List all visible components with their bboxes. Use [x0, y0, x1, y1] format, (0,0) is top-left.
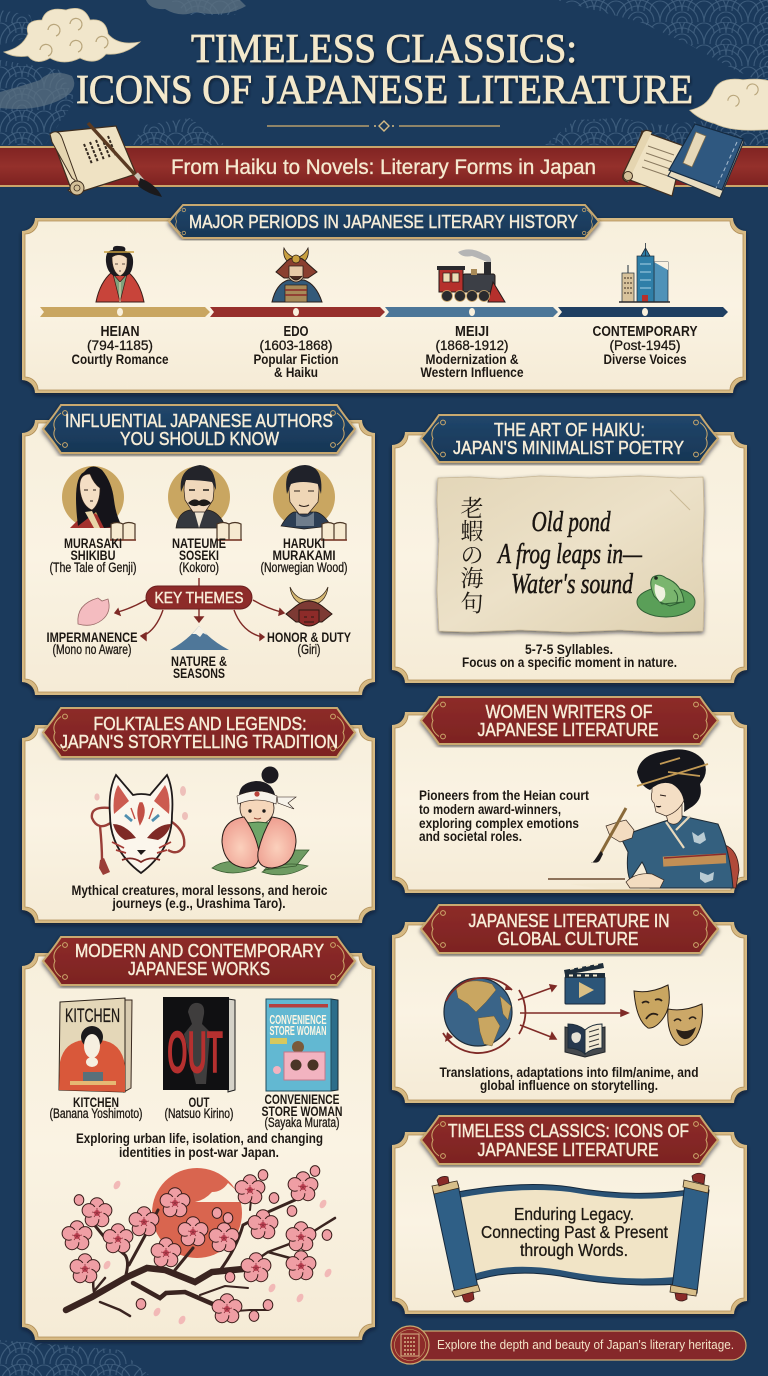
- book labels: (Natsuo Kirino): [164, 1106, 234, 1121]
- book labels: (Sayaka Murata): [264, 1115, 340, 1130]
- global caption: global influence on storytelling.: [480, 1078, 658, 1093]
- icon: scroll and brush: [50, 123, 162, 197]
- label: heian: (794-1185): [87, 338, 153, 353]
- vertical japanese text: 海: [460, 560, 484, 593]
- label: heian: HEIAN: [100, 324, 140, 340]
- label: contemporary: Diverse Voices: [604, 352, 686, 367]
- women writers text: exploring complex emotions: [419, 816, 579, 831]
- theme labels: SEASONS: [173, 666, 225, 681]
- icon: seal: [391, 1326, 429, 1364]
- panel: enduring legacy: [392, 1116, 747, 1314]
- cloud top left: [4, 8, 140, 62]
- book labels: (Banana Yoshimoto): [50, 1106, 142, 1121]
- haiku lines: Water's sound: [511, 569, 634, 600]
- book: convenience store woman: CONVENIENCE: [270, 1013, 326, 1027]
- panel: global culture: [392, 905, 747, 1103]
- heading banner: FOLKTALES AND LEGENDS:: [94, 714, 306, 734]
- heading banner: INFLUENTIAL JAPANESE AUTHORS: [65, 411, 333, 431]
- women writers text: to modern award-winners,: [419, 802, 561, 817]
- grey cloud top: [146, 0, 246, 14]
- icon: open book and blue book: [623, 124, 744, 198]
- title: TIMELESS CLASSICS:: [191, 25, 577, 71]
- label: meiji: Western Influence: [420, 365, 524, 380]
- panel: women writers: [392, 697, 747, 893]
- vertical japanese text: 蝦: [460, 513, 484, 546]
- key themes pill: KEY THEMES: [154, 590, 244, 607]
- heading banner: [43, 708, 355, 757]
- panel: modern and contemporary works: [22, 937, 375, 1340]
- global caption: [440, 1065, 698, 1093]
- heading banner: [43, 937, 355, 985]
- book: convenience store woman: [266, 999, 338, 1091]
- haiku lines: A frog leaps in—: [496, 539, 643, 570]
- subtitle: From Haiku to Novels: Literary Forms in Japan: [171, 155, 596, 179]
- title divider: [267, 121, 500, 131]
- panel: major periods: [22, 205, 746, 393]
- illustration: red sun: [152, 1168, 242, 1258]
- book labels: OUT: [188, 1095, 210, 1110]
- illustration: woman writing with brush: [548, 749, 739, 889]
- legacy text: Connecting Past & Present: [481, 1222, 668, 1242]
- icon: city skyscrapers: [619, 243, 670, 302]
- women writers text: [419, 788, 589, 844]
- title: ICONS OF JAPANESE LITERATURE: [76, 66, 693, 112]
- label: edo: & Haiku: [274, 365, 318, 380]
- heading banner: [421, 415, 718, 462]
- label: contemporary: (Post-1945): [610, 338, 680, 353]
- heading banner: JAPANESE LITERATURE: [478, 720, 658, 740]
- label: edo: Popular Fiction: [254, 352, 338, 367]
- panel: folktales: [22, 708, 375, 923]
- heading banner: MODERN AND CONTEMPORARY: [75, 941, 324, 961]
- label: edo: (1603-1868): [260, 338, 332, 353]
- heading banner: GLOBAL CULTURE: [498, 929, 638, 949]
- portrait: murasaki shikibu: [62, 466, 136, 540]
- icon: film clapperboard: [564, 963, 605, 1004]
- icon: comedy and tragedy masks: [634, 985, 702, 1045]
- cloud right: [690, 79, 768, 130]
- heading banner: TIMELESS CLASSICS: ICONS OF: [448, 1121, 689, 1141]
- book labels: KITCHEN: [73, 1095, 119, 1110]
- modern works caption: Exploring urban life, isolation, and changing: [76, 1131, 323, 1146]
- illustration: scroll: [432, 1173, 709, 1302]
- heading banner: JAPANESE LITERATURE: [478, 1140, 658, 1160]
- panel: art of haiku: [392, 415, 747, 683]
- author names: (The Tale of Genji): [50, 560, 136, 575]
- women writers text: Pioneers from the Heian court: [419, 788, 589, 803]
- vertical japanese text: [460, 490, 484, 618]
- author names: NATEUME: [172, 536, 226, 551]
- haiku lines: Old pond: [532, 507, 611, 538]
- key themes pill: [146, 586, 252, 609]
- folktales caption: journeys (e.g., Urashima Taro).: [112, 896, 286, 911]
- book: out: [163, 997, 235, 1092]
- heading banner: [421, 697, 718, 744]
- legacy text: [481, 1204, 668, 1260]
- heading banner: [421, 1116, 718, 1164]
- global arrows: [518, 985, 628, 1039]
- label: heian: Courtly Romance: [72, 352, 169, 367]
- theme labels: [46, 630, 351, 681]
- global caption: Translations, adaptations into film/anime, and: [440, 1065, 698, 1080]
- heading banner: [43, 405, 355, 453]
- book: kitchen: [59, 998, 132, 1092]
- blossoms: [62, 1166, 332, 1323]
- heading banner: JAPANESE WORKS: [128, 959, 270, 979]
- label: edo: [254, 324, 338, 380]
- heading banner: JAPAN'S STORYTELLING TRADITION: [60, 732, 338, 752]
- author names: SOSEKI: [179, 548, 219, 563]
- icon: falling petals: [94, 786, 188, 820]
- heading banner: MAJOR PERIODS IN JAPANESE LITERARY HISTORY: [189, 212, 578, 232]
- haiku caption: [462, 642, 677, 670]
- theme labels: (Giri): [298, 642, 320, 657]
- label: meiji: MEIJI: [455, 324, 489, 340]
- label: meiji: Modernization &: [426, 352, 519, 367]
- panel: influential authors: [22, 405, 375, 695]
- icon: samurai: [272, 248, 322, 302]
- author names: (Norwegian Wood): [260, 560, 348, 575]
- legacy text: through Words.: [520, 1240, 628, 1260]
- folktales caption: [72, 883, 328, 911]
- heading banner: YOU SHOULD KNOW: [120, 429, 279, 449]
- label: meiji: (1868-1912): [436, 338, 508, 353]
- haiku caption: 5-7-5 Syllables.: [525, 642, 613, 657]
- label: contemporary: CONTEMPORARY: [592, 324, 698, 340]
- torn paper with haiku: [437, 476, 704, 632]
- theme labels: HONOR & DUTY: [267, 630, 351, 645]
- icon: kitsune fox mask: [92, 775, 184, 875]
- timeline arrows: [40, 307, 728, 317]
- footer pill: [408, 1331, 746, 1360]
- vertical japanese text: の: [460, 537, 484, 570]
- grey cloud left: [0, 73, 74, 109]
- theme labels: NATURE &: [171, 654, 227, 669]
- icon: mount fuji: [170, 626, 229, 650]
- label: heian: [72, 324, 169, 367]
- theme labels: IMPERMANENCE: [46, 630, 138, 645]
- heading banner: [169, 205, 599, 238]
- icon: kabuto helmet: [286, 587, 332, 626]
- icon: momotaro in peach: [212, 766, 309, 875]
- subtitle ribbon: [0, 146, 768, 187]
- label: contemporary: [592, 324, 698, 367]
- footer text: Explore the depth and beauty of Japan's literary heritage.: [437, 1337, 734, 1352]
- label: edo: EDO: [284, 324, 308, 340]
- icon: globe: [443, 978, 525, 1053]
- icon: frog on lily pad: [637, 575, 695, 617]
- illustration: cherry blossom branch: [62, 1166, 335, 1325]
- heading banner: WOMEN WRITERS OF: [486, 702, 653, 722]
- vertical japanese text: 老: [460, 490, 484, 523]
- theme labels: (Mono no Aware): [52, 642, 132, 657]
- author names: (Kokoro): [179, 560, 219, 575]
- book labels: CONVENIENCE: [264, 1092, 340, 1107]
- icon: cherry petal: [78, 598, 109, 625]
- women writers text: and societal roles.: [419, 829, 522, 844]
- theme connectors: [115, 578, 284, 640]
- author names: MURAKAMI: [272, 548, 336, 563]
- heading banner: [421, 905, 718, 953]
- author names: [50, 536, 348, 575]
- author names: MURASAKI: [64, 536, 122, 551]
- modern works caption: identities in post-war Japan.: [119, 1145, 279, 1160]
- label: meiji: [420, 324, 524, 380]
- portrait: haruki murakami: [273, 465, 347, 540]
- icon: steam train: [437, 249, 505, 302]
- title: [76, 25, 693, 112]
- author names: SHIKIBU: [70, 548, 116, 563]
- portrait: natsume soseki: [168, 465, 242, 540]
- book: out: OUT: [167, 1019, 223, 1086]
- heading banner: THE ART OF HAIKU:: [494, 420, 645, 440]
- legacy text: Enduring Legacy.: [514, 1204, 634, 1224]
- book: kitchen: KITCHEN: [65, 1005, 120, 1027]
- icon: open illustrated book: [565, 1024, 605, 1057]
- heading banner: JAPANESE LITERATURE IN: [468, 911, 670, 931]
- folktales caption: Mythical creatures, moral lessons, and heroic: [72, 883, 328, 898]
- book: convenience store woman: STORE WOMAN: [270, 1024, 326, 1038]
- book labels: [50, 1092, 342, 1130]
- icon: heian woman: [96, 246, 144, 302]
- book labels: STORE WOMAN: [262, 1104, 342, 1119]
- author names: HARUKI: [283, 536, 325, 551]
- modern works caption: [76, 1131, 323, 1160]
- vertical japanese text: 句: [460, 585, 484, 618]
- haiku caption: Focus on a specific moment in nature.: [462, 655, 677, 670]
- heading banner: JAPAN'S MINIMALIST POETRY: [453, 438, 684, 458]
- falling petals: [102, 1180, 333, 1325]
- haiku lines: [496, 507, 643, 600]
